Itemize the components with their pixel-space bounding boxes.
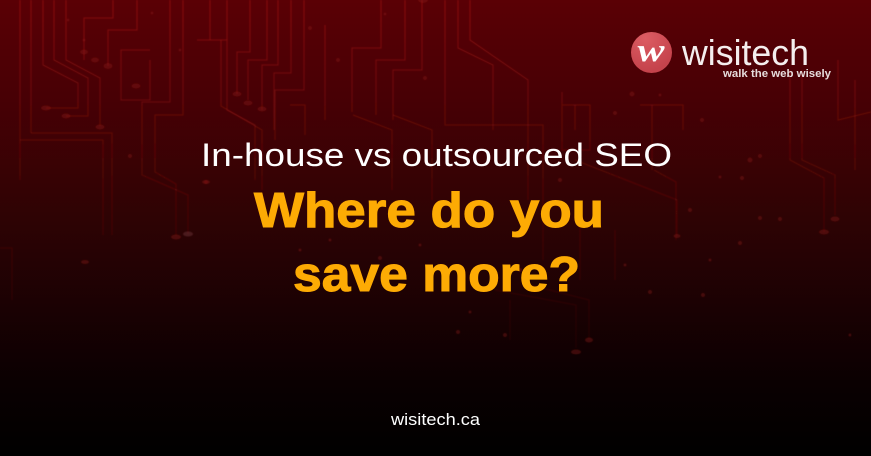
- icon: wisitech logo badge: [631, 32, 672, 73]
- website url: wisitech.ca: [390, 410, 481, 429]
- headline: [254, 184, 604, 302]
- subtitle: In-house vs outsourced SEO: [201, 137, 672, 173]
- logo: [631, 32, 832, 80]
- headline line 1: Where do you: [254, 184, 604, 238]
- icon: wisitech logo badge: w: [638, 33, 666, 69]
- circuit trace end nodes and scattered dots: [41, 0, 852, 354]
- headline line 2: save more?: [293, 248, 580, 302]
- logo wordmark: wisitech: [681, 32, 809, 73]
- logo tagline: walk the web wisely: [722, 68, 832, 80]
- circuit board background pattern: [0, 0, 871, 348]
